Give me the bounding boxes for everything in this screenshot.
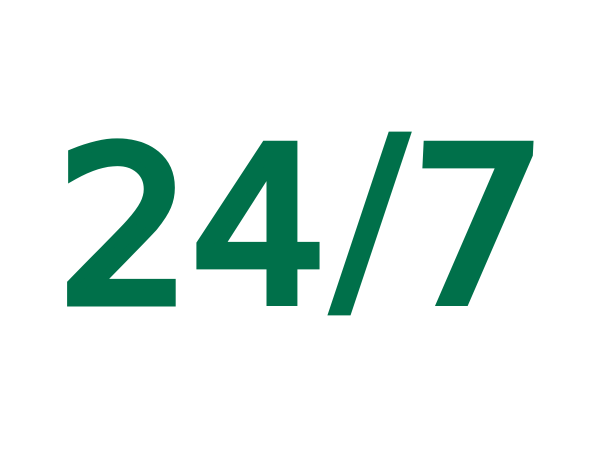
title: 24/7: 7 (401, 104, 549, 352)
title: 24/7: 2 (56, 104, 192, 352)
title: 24/7: 4 (191, 104, 327, 352)
title: 24/7 (56, 89, 549, 352)
title: 24/7: / (330, 89, 411, 345)
